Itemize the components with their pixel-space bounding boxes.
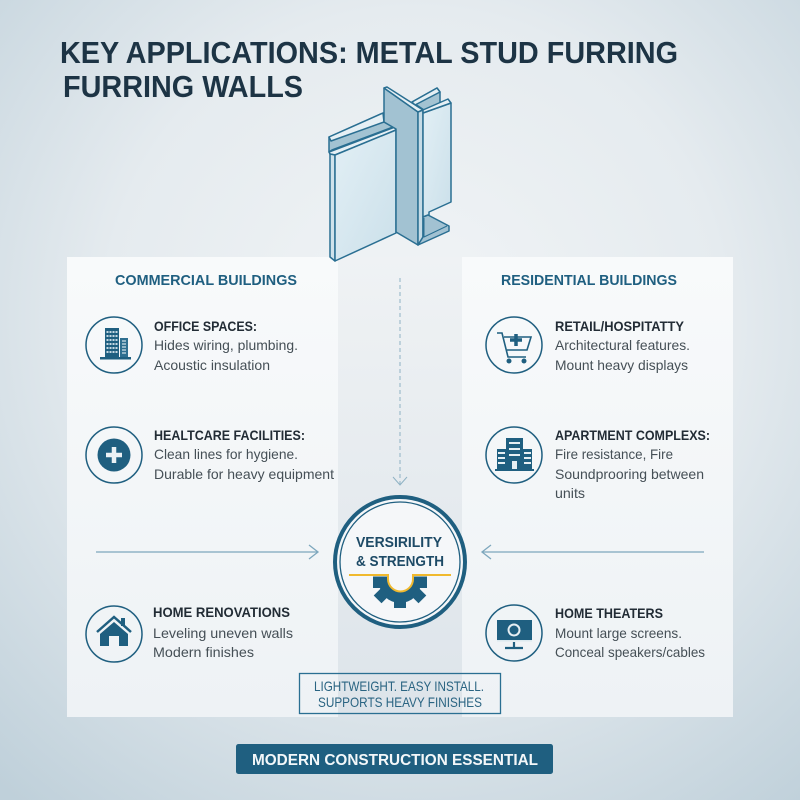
icon: shopping cart <box>486 317 542 373</box>
text: home theaters: Mount large screens. <box>555 625 682 641</box>
text: healthcare facilities: HEALTCARE FACILITIES: <box>154 427 305 443</box>
text: apartment complexes: Fire resistance, Fire <box>555 446 673 462</box>
title: KEY APPLICATIONS: METAL STUD FURRING <box>60 35 678 70</box>
accent: yellow line <box>349 575 451 592</box>
text: home renovations: HOME RENOVATIONS <box>153 604 290 620</box>
text: retail hospitality: RETAIL/HOSPITATTY <box>555 318 685 334</box>
text: home theaters: HOME THEATERS <box>555 605 663 621</box>
text: retail hospitality: Mount heavy displays <box>555 357 688 373</box>
text: healthcare facilities: Clean lines for hygiene. <box>154 446 298 462</box>
text: badge label <box>356 534 444 570</box>
text: retail hospitality <box>555 318 690 373</box>
heading: commercial buildings: COMMERCIAL BUILDINGS <box>115 272 297 289</box>
text: badge label: VERSIRILITY <box>356 534 442 551</box>
item: home renovations <box>86 604 293 662</box>
arrow: top down to centre <box>393 278 407 485</box>
text: badge label: & STRENGTH <box>356 553 444 570</box>
text: home theaters <box>555 605 705 660</box>
text: healthcare facilities: Durable for heavy equipment <box>154 466 334 482</box>
heading: residential buildings: RESIDENTIAL BUILDINGS <box>501 272 677 289</box>
item: home theaters <box>486 605 705 661</box>
icon: apartment block <box>486 427 542 483</box>
item: healthcare facilities <box>86 427 334 483</box>
text: apartment complexes: units <box>555 485 585 501</box>
text: office spaces: Acoustic insulation <box>154 357 270 373</box>
arrow: right to centre <box>482 545 704 559</box>
panel: residential buildings <box>462 257 733 717</box>
item: retail hospitality <box>486 317 690 373</box>
text: home renovations: Leveling uneven walls <box>153 625 293 641</box>
text: office spaces <box>154 318 298 373</box>
text: apartment complexes: APARTMENT COMPLEXS: <box>555 427 710 443</box>
callout: lightweight: LIGHTWEIGHT. EASY INSTALL. <box>314 678 484 694</box>
text: apartment complexes: Soundprooring between <box>555 466 704 482</box>
badge: versatility and strength <box>335 497 465 627</box>
text: home renovations: Modern finishes <box>153 644 254 660</box>
panel: commercial buildings <box>67 257 338 717</box>
text: home theaters: Conceal speakers/cables <box>555 644 705 660</box>
arrow: left to centre <box>96 545 318 559</box>
callout: lightweight <box>300 674 500 714</box>
icon: gear <box>373 576 427 608</box>
title <box>60 35 678 104</box>
text: retail hospitality: Architectural features. <box>555 337 690 353</box>
banner: modern construction essential: MODERN CONSTRUCTION ESSENTIAL <box>252 752 538 769</box>
text: healthcare facilities <box>154 427 334 482</box>
icon: medical cross <box>86 427 142 483</box>
text: office spaces: OFFICE SPACES: <box>154 318 257 334</box>
panel: central band <box>338 257 462 717</box>
item: apartment complexes <box>486 427 710 501</box>
text: home renovations <box>153 604 293 660</box>
item: office spaces <box>86 317 298 373</box>
icon: office towers <box>86 317 142 373</box>
icon: metal stud illustration <box>329 87 451 261</box>
text: apartment complexes <box>555 427 710 501</box>
icon: house <box>86 606 142 662</box>
icon: monitor <box>486 605 542 661</box>
text: office spaces: Hides wiring, plumbing. <box>154 337 298 353</box>
title: FURRING WALLS <box>63 69 303 104</box>
callout: lightweight: SUPPORTS HEAVY FINISHES <box>318 694 482 710</box>
banner: modern construction essential <box>236 744 553 774</box>
